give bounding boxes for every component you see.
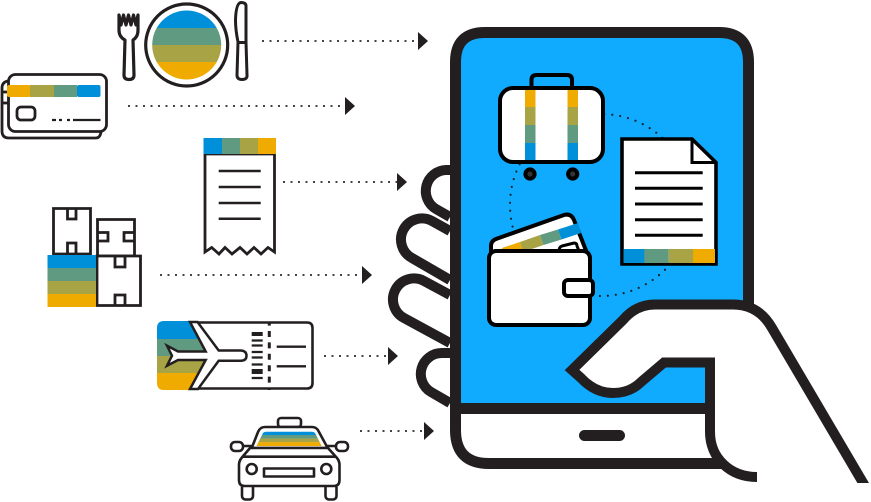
icon: fork (119, 15, 138, 80)
phone home button (579, 430, 625, 441)
icon: credit cards (2, 74, 106, 138)
icon: plate and cutlery (119, 2, 247, 86)
arrow: receipt to phone (283, 173, 407, 191)
phone screen (456, 32, 748, 408)
icon: document (622, 139, 716, 264)
icon: plate (146, 4, 228, 86)
arrow: ticket to phone (324, 347, 398, 365)
arrow: taxi to phone (360, 422, 434, 440)
icon: receipt (204, 138, 276, 254)
arrow: plate to phone (262, 32, 428, 50)
phone home bar (456, 408, 715, 465)
icon: airline ticket (157, 321, 312, 390)
icon: knife (236, 2, 247, 80)
hand thumb (573, 304, 864, 483)
icon: wallet (489, 215, 593, 325)
icon: taxi (231, 418, 348, 500)
icon: stacked parcels (48, 208, 140, 307)
phone (456, 32, 748, 465)
fingers behind phone (393, 170, 450, 403)
dotted circle linking icons (510, 114, 692, 296)
arrow: parcels to phone (160, 266, 372, 284)
arrow: cards to phone (128, 97, 355, 115)
hand outline (572, 304, 871, 498)
icon: suitcase (500, 75, 603, 179)
phone outline (456, 32, 748, 464)
